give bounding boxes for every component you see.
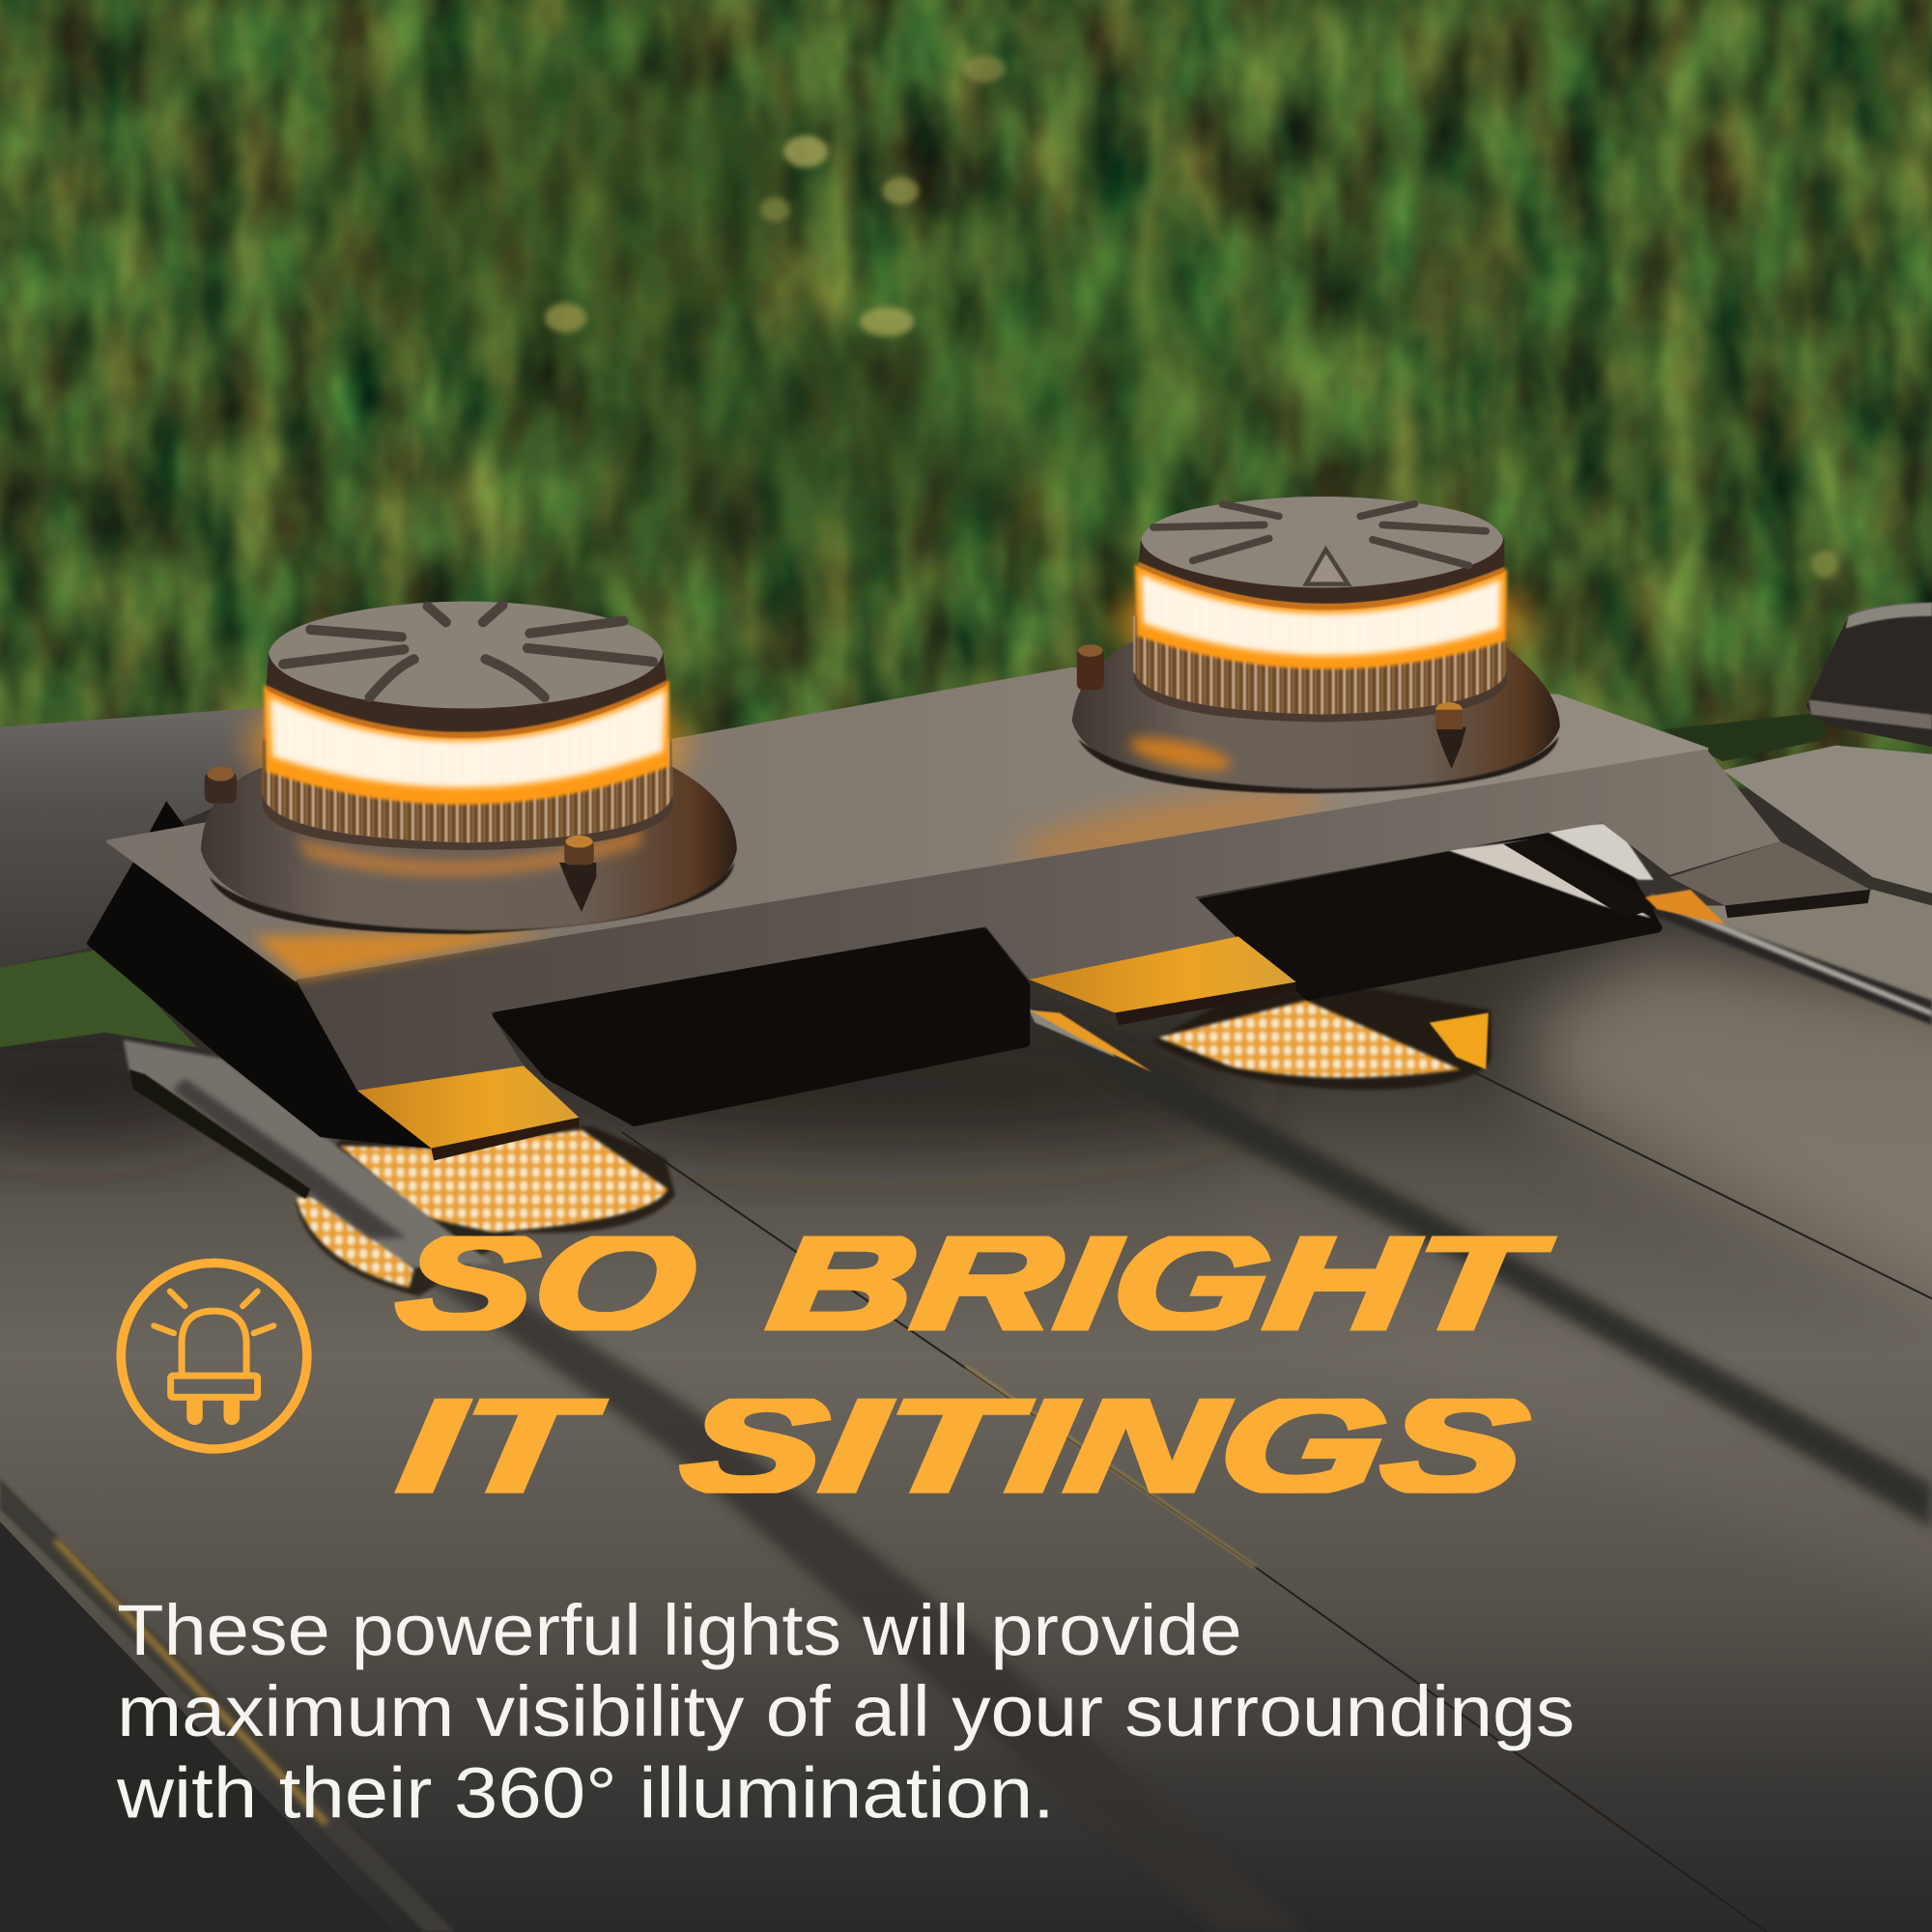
- left foot tab: [357, 1065, 579, 1149]
- lamp one front screw: [559, 836, 596, 912]
- lamp one clear lens: [263, 739, 672, 842]
- heading line one: SO: [389, 1204, 704, 1359]
- left ridge shiny upper part: [124, 1040, 493, 1267]
- icon prongs: [195, 1403, 232, 1417]
- mounting bracket: [86, 669, 1870, 1161]
- lamp one, left: [201, 601, 737, 934]
- heading line two: IT: [391, 1366, 611, 1521]
- heading: [394, 1236, 1557, 1493]
- lamp one cap slots: [283, 605, 653, 697]
- lamp two clear lens: [1133, 616, 1507, 715]
- right light panel: [1722, 746, 1932, 894]
- right glossy band: [1651, 890, 1932, 1023]
- bracket top plate: [108, 669, 1707, 980]
- lamp one glow: [246, 669, 690, 822]
- lamp two rear screw: [1077, 644, 1104, 690]
- bracket underside shadow: [86, 801, 443, 1150]
- lamp two front screw: [1435, 702, 1466, 769]
- icon bulb: [182, 1311, 246, 1373]
- lamp one base: [201, 766, 737, 930]
- background foliage: [0, 0, 1932, 788]
- reflection of lamp one: [296, 1126, 675, 1296]
- bracket front face: [296, 750, 1780, 1091]
- plate warm patch: [1009, 776, 1332, 880]
- lamp two amber patch: [1127, 731, 1234, 777]
- lamp two base: [1072, 639, 1560, 788]
- lamp one amber rim light: [296, 828, 640, 876]
- body text: [116, 1590, 1575, 1833]
- far ridge: [1516, 850, 1932, 1025]
- body line three: with their 360° illumination.: [116, 1752, 1055, 1833]
- heading line one: [394, 1236, 1557, 1331]
- centre ridge: [1028, 997, 1932, 1528]
- lamp two cap wedge: [1306, 550, 1348, 584]
- left cab roof: [0, 707, 370, 967]
- lamp two LED band: [1135, 564, 1507, 669]
- shadow under left ridge: [129, 1069, 310, 1199]
- heading line two: SITINGS: [673, 1366, 1536, 1521]
- warm glow on plate: [252, 930, 554, 980]
- right window: [1203, 828, 1658, 996]
- hood ridges and seams: [0, 850, 1932, 1932]
- lamp two glow: [1112, 558, 1530, 686]
- lamp one LED band: [264, 680, 669, 805]
- lamp one left screw: [205, 766, 237, 804]
- orange strip reflections: [1645, 890, 1725, 924]
- lamp one cap top: [269, 601, 663, 708]
- green reflection strip: [0, 949, 197, 1047]
- truck hood panels: [0, 707, 1932, 1932]
- icon plug base: [171, 1376, 258, 1397]
- lamp two, right: [1072, 497, 1560, 793]
- left ridge soft lower part: [412, 1267, 1306, 1932]
- lamp two cap top: [1141, 497, 1503, 587]
- hood light and dark reflections: [0, 949, 1932, 1932]
- icon rays: [154, 1292, 273, 1333]
- right foot tab: [1669, 841, 1870, 906]
- lamp one cap rim: [267, 622, 667, 734]
- panel seams: [622, 1070, 1932, 1932]
- body line two: maximum visibility of all your surroundings: [117, 1671, 1575, 1751]
- heading line one: BRIGHT: [761, 1204, 1559, 1359]
- reflection of lamp two: [1152, 985, 1491, 1090]
- body line one: These powerful lights will provide: [117, 1590, 1242, 1670]
- centre foot tab: [1029, 936, 1296, 1012]
- lower-left ridge: [0, 1479, 456, 1932]
- lamp two cap slots: [1153, 504, 1486, 565]
- heading line two: [394, 1399, 1532, 1493]
- top-right truck mirror: [1663, 603, 1932, 761]
- left window: [497, 933, 1025, 1122]
- lamp two cap rim: [1139, 513, 1504, 604]
- icon: beacon light in circle: [121, 1263, 307, 1449]
